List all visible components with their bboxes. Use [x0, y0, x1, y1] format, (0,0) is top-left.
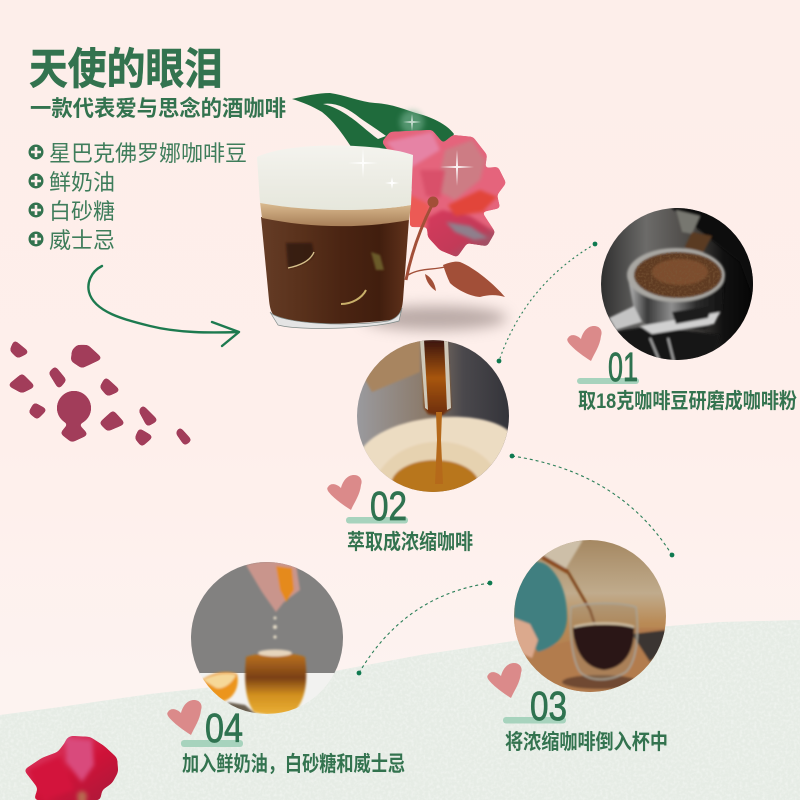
coffee layer — [261, 217, 409, 324]
step 3 photo: pouring into glass — [514, 540, 666, 692]
glass base — [270, 308, 402, 328]
stem — [406, 205, 432, 280]
step 2 heart — [327, 475, 362, 510]
step 1 number: 01 — [608, 344, 638, 390]
step 2 number: 02 — [370, 483, 407, 529]
ingredient: whisky: 威士忌 — [49, 228, 115, 253]
step 2 caption: 萃取成浓缩咖啡 — [347, 530, 473, 554]
subtitle: 一款代表爱与思念的酒咖啡 — [30, 96, 286, 121]
milk foam — [257, 146, 413, 210]
step 3 number — [503, 683, 567, 729]
cup shadow — [363, 306, 507, 330]
step 1 heart — [567, 326, 602, 361]
step 4 number — [181, 705, 243, 751]
small brown leaf — [425, 274, 436, 291]
coffee glass — [257, 146, 413, 328]
scattered rose petals — [11, 343, 189, 444]
step 3 number: 03 — [530, 683, 567, 729]
title: 天使的眼泪 — [29, 46, 223, 94]
brown leaf — [443, 262, 505, 297]
flower petals — [382, 130, 506, 257]
rose flower bottom left — [24, 736, 118, 800]
step 3 heart — [487, 663, 522, 698]
dotted connector: step 3 to 4 — [357, 581, 492, 675]
step 4 heart — [167, 700, 202, 735]
step 4 photo: orange juice drink — [191, 561, 343, 717]
textured green ground band — [0, 620, 800, 800]
ingredient: coffee beans: 星巴克佛罗娜咖啡豆 — [49, 141, 247, 166]
step 4 number: 04 — [205, 705, 243, 751]
flower with stem and brown leaves — [382, 130, 506, 297]
step 1 number — [577, 344, 639, 390]
step 2 photo: espresso extraction — [357, 340, 509, 492]
step 1 photo: grinding into portafilter — [600, 207, 754, 365]
step 4 caption: 加入鲜奶油，白砂糖和威士忌 — [182, 752, 405, 776]
step 2 number — [346, 483, 408, 529]
dotted connector: step 1 to 2 — [497, 242, 597, 363]
ice cube highlights — [286, 243, 314, 268]
crema layer — [260, 202, 411, 226]
arrow: ingredients to cup — [88, 266, 239, 346]
sparkles — [348, 114, 474, 189]
green leaf — [292, 93, 454, 160]
ingredient list — [28, 141, 247, 253]
ingredient: white sugar: 白砂糖 — [49, 199, 115, 224]
dotted connector: step 2 to 3 — [510, 454, 674, 557]
ingredient: cream: 鲜奶油 — [49, 170, 115, 195]
step 3 caption: 将浓缩咖啡倒入杯中 — [505, 730, 668, 754]
